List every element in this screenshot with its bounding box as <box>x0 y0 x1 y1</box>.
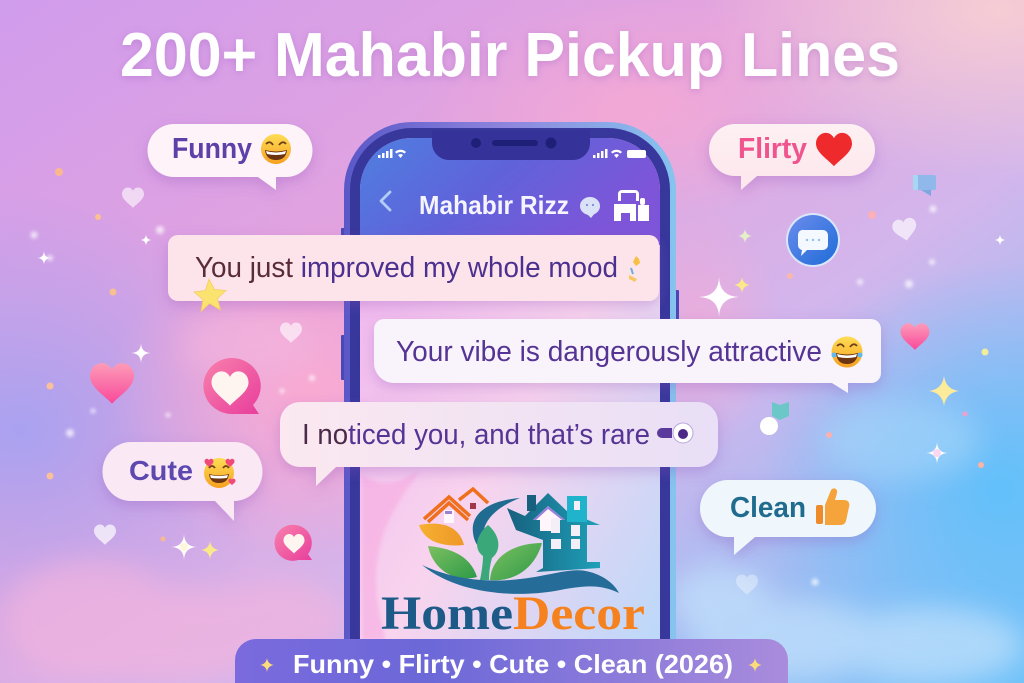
logo: green center leaf <box>477 525 498 580</box>
icon: pink heart right <box>900 323 930 350</box>
message: dangerously attractive: Your vibe is dangerously attractive <box>396 336 822 368</box>
bubble: Funny: Funny <box>172 133 252 165</box>
bubble: Clean: Clean <box>730 492 806 524</box>
status bar right <box>593 149 646 158</box>
phone <box>341 122 679 640</box>
decorative hearts <box>94 188 919 595</box>
logo: green left leaf <box>428 546 477 578</box>
back arrow <box>381 192 390 210</box>
icon: heart chat bubble large <box>203 358 261 414</box>
phone side buttons <box>341 228 679 380</box>
logo: house <box>507 493 600 572</box>
logo: green right leaf <box>490 543 542 580</box>
phone frame <box>344 122 676 640</box>
title: 200+ Mahabir Pickup Lines <box>120 21 900 90</box>
emoji: tears of joy <box>832 336 862 368</box>
message: noticed you <box>280 402 718 486</box>
logo: crescent <box>473 498 520 551</box>
background bokeh dots <box>30 206 936 586</box>
chat bubble glyph <box>580 197 600 218</box>
house glyph <box>614 190 649 221</box>
bubble: Funny <box>148 124 312 190</box>
small pastel dots <box>46 168 988 542</box>
footer star left <box>260 658 274 672</box>
message: dangerously attractive <box>374 319 881 393</box>
message: improved mood <box>168 235 659 301</box>
logo: orange leaf <box>419 524 464 545</box>
message: noticed you: I noticed you, and that’s rare <box>302 419 650 451</box>
footer text: Funny • Flirty • Cute • Clean (2026) <box>293 649 733 679</box>
bubble: Cute <box>102 442 262 521</box>
phone header <box>360 138 660 245</box>
background clouds <box>0 313 1024 683</box>
icon: yellow star <box>194 279 226 312</box>
logo: wordmark: HomeDecor <box>381 587 645 640</box>
decorative sparkles <box>37 229 1006 560</box>
emoji: eyes <box>657 423 693 443</box>
logo: orange roofs <box>424 489 488 522</box>
icon: small teal book <box>772 402 789 420</box>
bubble: Clean <box>700 480 876 555</box>
bubble: Flirty: Flirty <box>738 133 807 165</box>
icon: large pink heart <box>90 363 134 404</box>
emoji: laughing <box>261 134 291 164</box>
logo: swoosh <box>422 565 619 594</box>
emoji: smiling with hearts <box>204 458 236 488</box>
phone bezel <box>350 128 670 640</box>
message: improved mood: You just improved my whole mood <box>195 252 618 284</box>
logo: small house mark <box>444 503 476 523</box>
emoji: thumbs up <box>816 488 849 525</box>
notch <box>432 130 590 160</box>
icon: heart chat bubble small <box>275 525 312 561</box>
footer star right <box>748 658 762 672</box>
footer pill <box>235 639 788 683</box>
bubble: Flirty <box>709 124 875 190</box>
bubble: Cute: Cute <box>129 455 193 486</box>
phone screen body <box>360 138 660 640</box>
emoji: sparkle figure <box>629 256 640 282</box>
status bar left <box>378 149 406 158</box>
icon: small blue chat square <box>913 175 936 196</box>
icon: blue chat disc <box>786 213 840 267</box>
logo: HomeDecor <box>381 489 645 640</box>
emoji: red heart <box>816 133 852 166</box>
chat name: Mahabir Rizz <box>419 190 569 220</box>
screen blob <box>362 470 420 640</box>
